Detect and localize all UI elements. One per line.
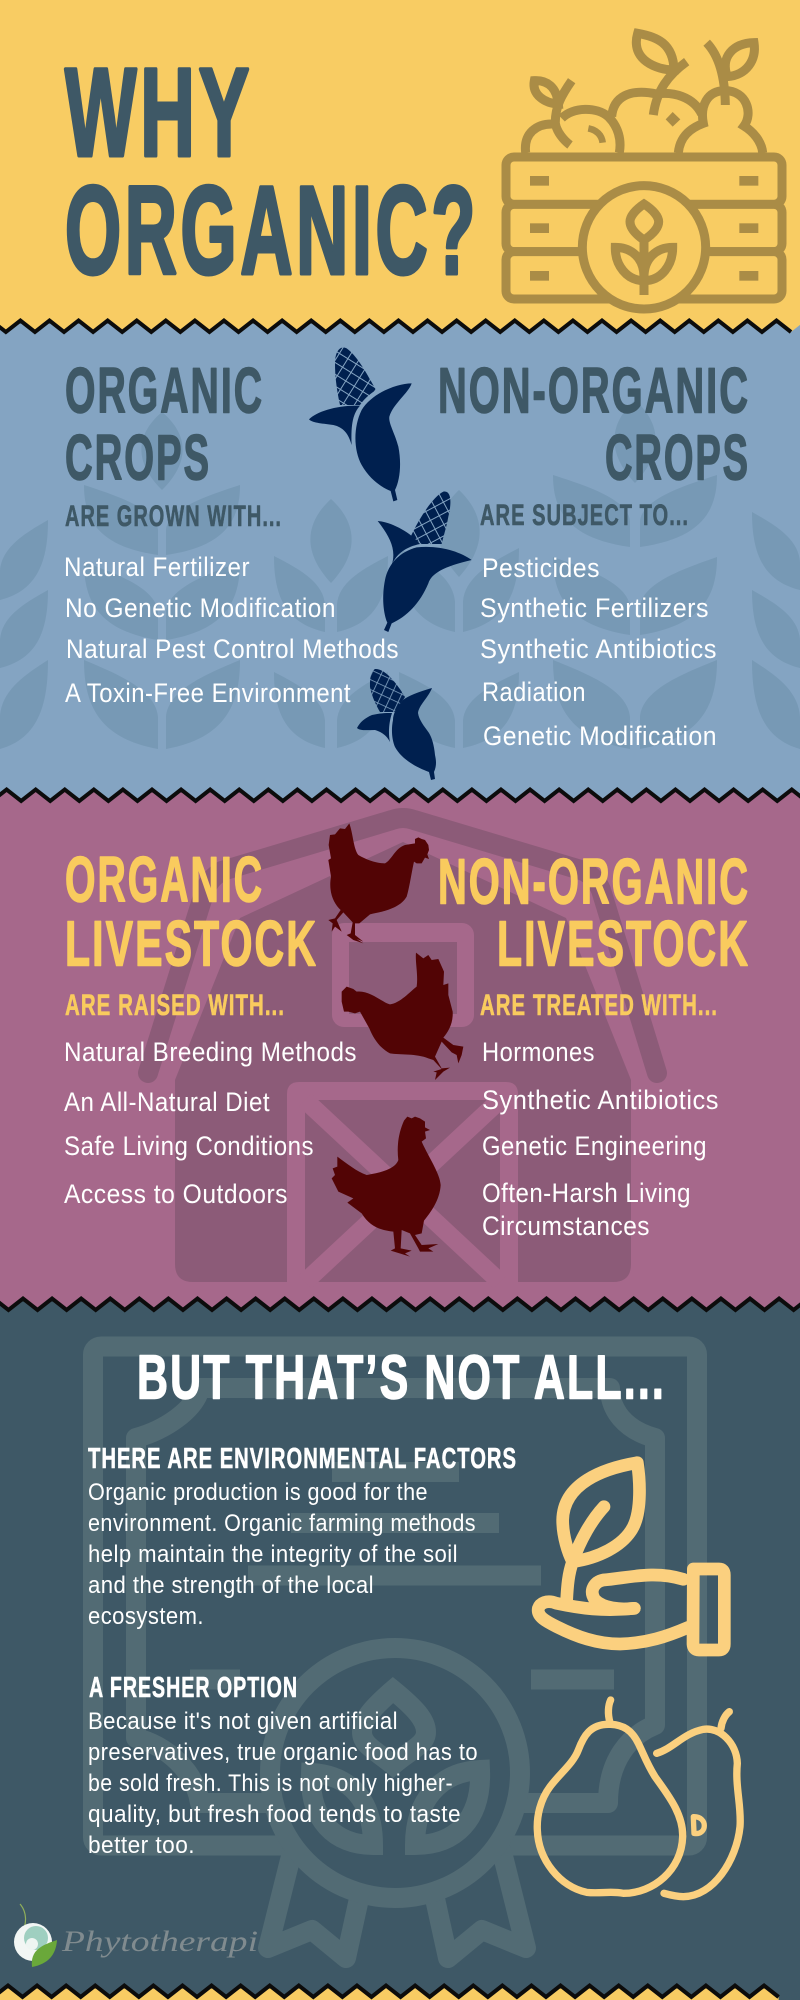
- panel: purple livestock background: [0, 790, 800, 1320]
- heading: organic livestock: ORGANIC: [65, 844, 264, 916]
- text block: environmental factors: and the strength of the local: [88, 1572, 374, 1599]
- text block: a fresher option: be sold fresh. This is not only higher-: [88, 1770, 453, 1797]
- background: barn: [148, 818, 657, 1282]
- list: non-organic livestock: Genetic Engineering: [482, 1131, 707, 1161]
- icon: chicken 2: [342, 953, 463, 1080]
- text block: a fresher option: better too.: [88, 1832, 195, 1859]
- text block: environmental factors: help maintain the integrity of the soil: [88, 1541, 458, 1568]
- footer yellow strip: [0, 1986, 779, 2000]
- list: non-organic livestock: Hormones: [482, 1037, 595, 1067]
- list: organic crops: Natural Pest Control Methods: [66, 634, 399, 664]
- text block: a fresher option: quality, but fresh food tends to taste: [88, 1801, 461, 1828]
- heading: non-organic livestock: [438, 846, 750, 980]
- list: organic crops: A Toxin-Free Environment: [65, 678, 351, 708]
- heading: organic livestock: [65, 844, 318, 980]
- list: non-organic livestock: Circumstances: [482, 1211, 650, 1241]
- list: non-organic livestock: Often-Harsh Living: [482, 1178, 691, 1208]
- list: organic livestock: Safe Living Conditions: [64, 1131, 314, 1161]
- list: organic crops: No Genetic Modification: [65, 593, 336, 623]
- zigzag divider: teal to purple: [0, 1298, 800, 1310]
- heading: organic crops: CROPS: [65, 422, 211, 494]
- list: organic crops: Natural Fertilizer: [64, 552, 250, 582]
- text block: environmental factors: environment. Organic farming methods: [88, 1510, 476, 1537]
- panel: dark teal background: [0, 1298, 800, 2000]
- subheading: a fresher option: A FRESHER OPTION: [89, 1672, 298, 1704]
- title: ORGANIC?: [65, 162, 479, 300]
- heading: organic crops: [65, 354, 264, 494]
- list: organic livestock: An All-Natural Diet: [64, 1087, 270, 1117]
- list: non-organic livestock: Synthetic Antibiotics: [482, 1085, 719, 1115]
- list: non-organic livestock: [482, 1037, 719, 1241]
- list: organic livestock: Access to Outdoors: [64, 1179, 288, 1209]
- background: organic certificate: [93, 1346, 697, 1958]
- zigzag divider: footer: [0, 1986, 779, 1997]
- icon: pears: [537, 1700, 740, 1897]
- list: organic livestock: [64, 1037, 357, 1209]
- subheading: are raised with: ARE RAISED WITH...: [65, 989, 285, 1022]
- text block: a fresher option: [88, 1708, 478, 1859]
- list: organic crops: [64, 552, 399, 708]
- list: organic livestock: Natural Breeding Methods: [64, 1037, 357, 1067]
- text block: environmental factors: [88, 1479, 476, 1630]
- text block: environmental factors: ecosystem.: [88, 1603, 204, 1630]
- list: non-organic crops: Radiation: [482, 677, 586, 707]
- text block: environmental factors: Organic production is good for the: [88, 1479, 428, 1506]
- subheading: are grown with: ARE GROWN WITH...: [65, 500, 282, 533]
- icon: chicken 1: [328, 823, 429, 943]
- list: non-organic crops: Synthetic Fertilizers: [480, 593, 709, 623]
- logo: phytotherapi: Phytotherapi: [61, 1925, 258, 1958]
- icon: corn 1: [309, 347, 412, 501]
- icon: hand holding leaf: [538, 1463, 724, 1650]
- title: [65, 44, 479, 300]
- title: WHY: [65, 44, 253, 182]
- subheading: environmental factors: THERE ARE ENVIRONMENTAL FACTORS: [88, 1443, 517, 1475]
- background: wheat stalks: [0, 400, 800, 749]
- list: non-organic crops: Pesticides: [482, 553, 600, 583]
- heading: non-organic crops: [438, 354, 750, 494]
- list: non-organic crops: Synthetic Antibiotics: [480, 634, 717, 664]
- icon: corn 3: [357, 669, 436, 780]
- heading: organic livestock: LIVESTOCK: [65, 908, 318, 980]
- heading: organic crops: ORGANIC: [65, 354, 264, 426]
- text block: a fresher option: preservatives, true organic food has to: [88, 1739, 478, 1766]
- text block: a fresher option: Because it's not given artificial: [88, 1708, 398, 1735]
- logo: phytotherapi: [14, 1904, 258, 1967]
- list: non-organic crops: Genetic Modification: [483, 721, 717, 751]
- subheading: are subject to: ARE SUBJECT TO...: [480, 499, 689, 532]
- icon: chicken 3: [332, 1117, 441, 1257]
- panel: blue crops background: [0, 320, 800, 800]
- list: non-organic crops: [480, 553, 717, 751]
- icon: corn 2: [378, 492, 472, 632]
- icon: fruit crate: [506, 33, 782, 309]
- zigzag divider: blue to purple: [0, 790, 800, 801]
- zigzag divider: yellow to blue: [0, 320, 791, 332]
- panel: yellow header background: [0, 0, 800, 340]
